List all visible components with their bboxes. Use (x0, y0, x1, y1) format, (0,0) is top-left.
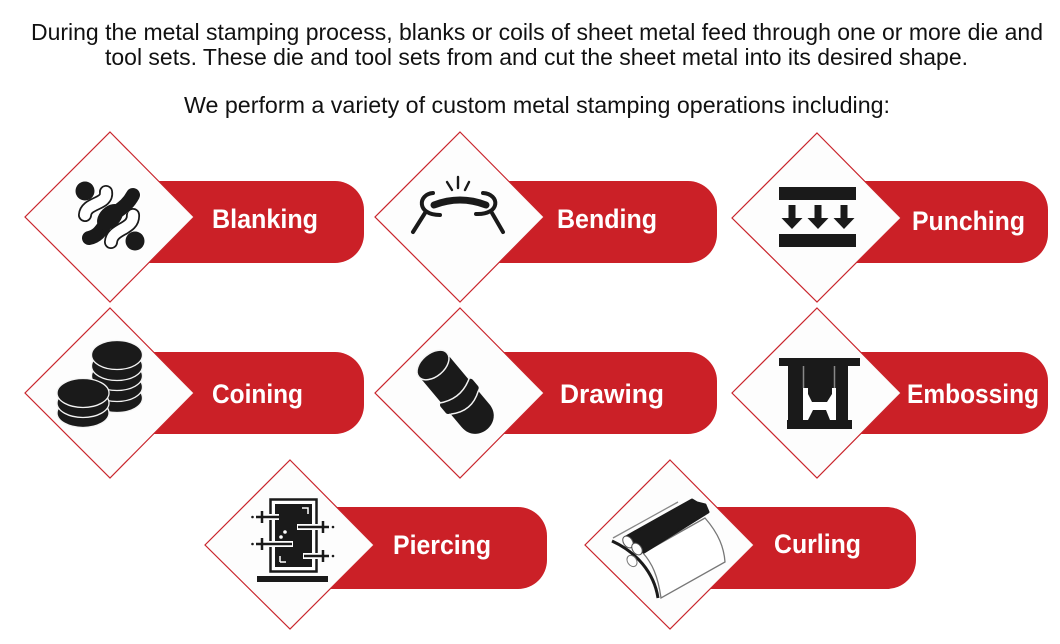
icon: curling rollers (612, 500, 725, 598)
intro text: tool sets. These die and tool sets from and cut the sheet metal into its desired shape. (105, 44, 968, 70)
label: Punching: Punching (912, 206, 1025, 236)
label: Piercing: Piercing (393, 530, 491, 560)
label: Bending: Bending (557, 204, 657, 234)
panel: Drawing (375, 308, 717, 478)
label: Blanking: Blanking (212, 204, 318, 234)
panel: Blanking (25, 132, 364, 302)
icon: bending (413, 177, 503, 232)
panel: Piercing (205, 460, 547, 629)
intro text: During the metal stamping process, blanks or coils of sheet metal feed through one or more die and (31, 19, 1043, 45)
icon: coins (57, 340, 142, 428)
panel: Bending (375, 132, 717, 302)
icon: cylinder (410, 343, 503, 443)
intro text: We perform a variety of custom metal stamping operations including: (184, 92, 890, 118)
icon: blanking (76, 182, 144, 250)
icon: piercing die (251, 500, 334, 582)
panel: Coining (25, 308, 364, 478)
panel: Embossing (732, 308, 1048, 478)
panel: Punching (732, 133, 1048, 302)
icon: press (779, 358, 860, 429)
label: Coining: Coining (212, 379, 303, 409)
label: Curling: Curling (774, 529, 861, 559)
label: Embossing: Embossing (907, 379, 1039, 409)
panel: Curling (585, 460, 916, 629)
intro text (31, 19, 1043, 118)
icon: punching (779, 187, 856, 247)
label: Drawing: Drawing (560, 379, 664, 409)
